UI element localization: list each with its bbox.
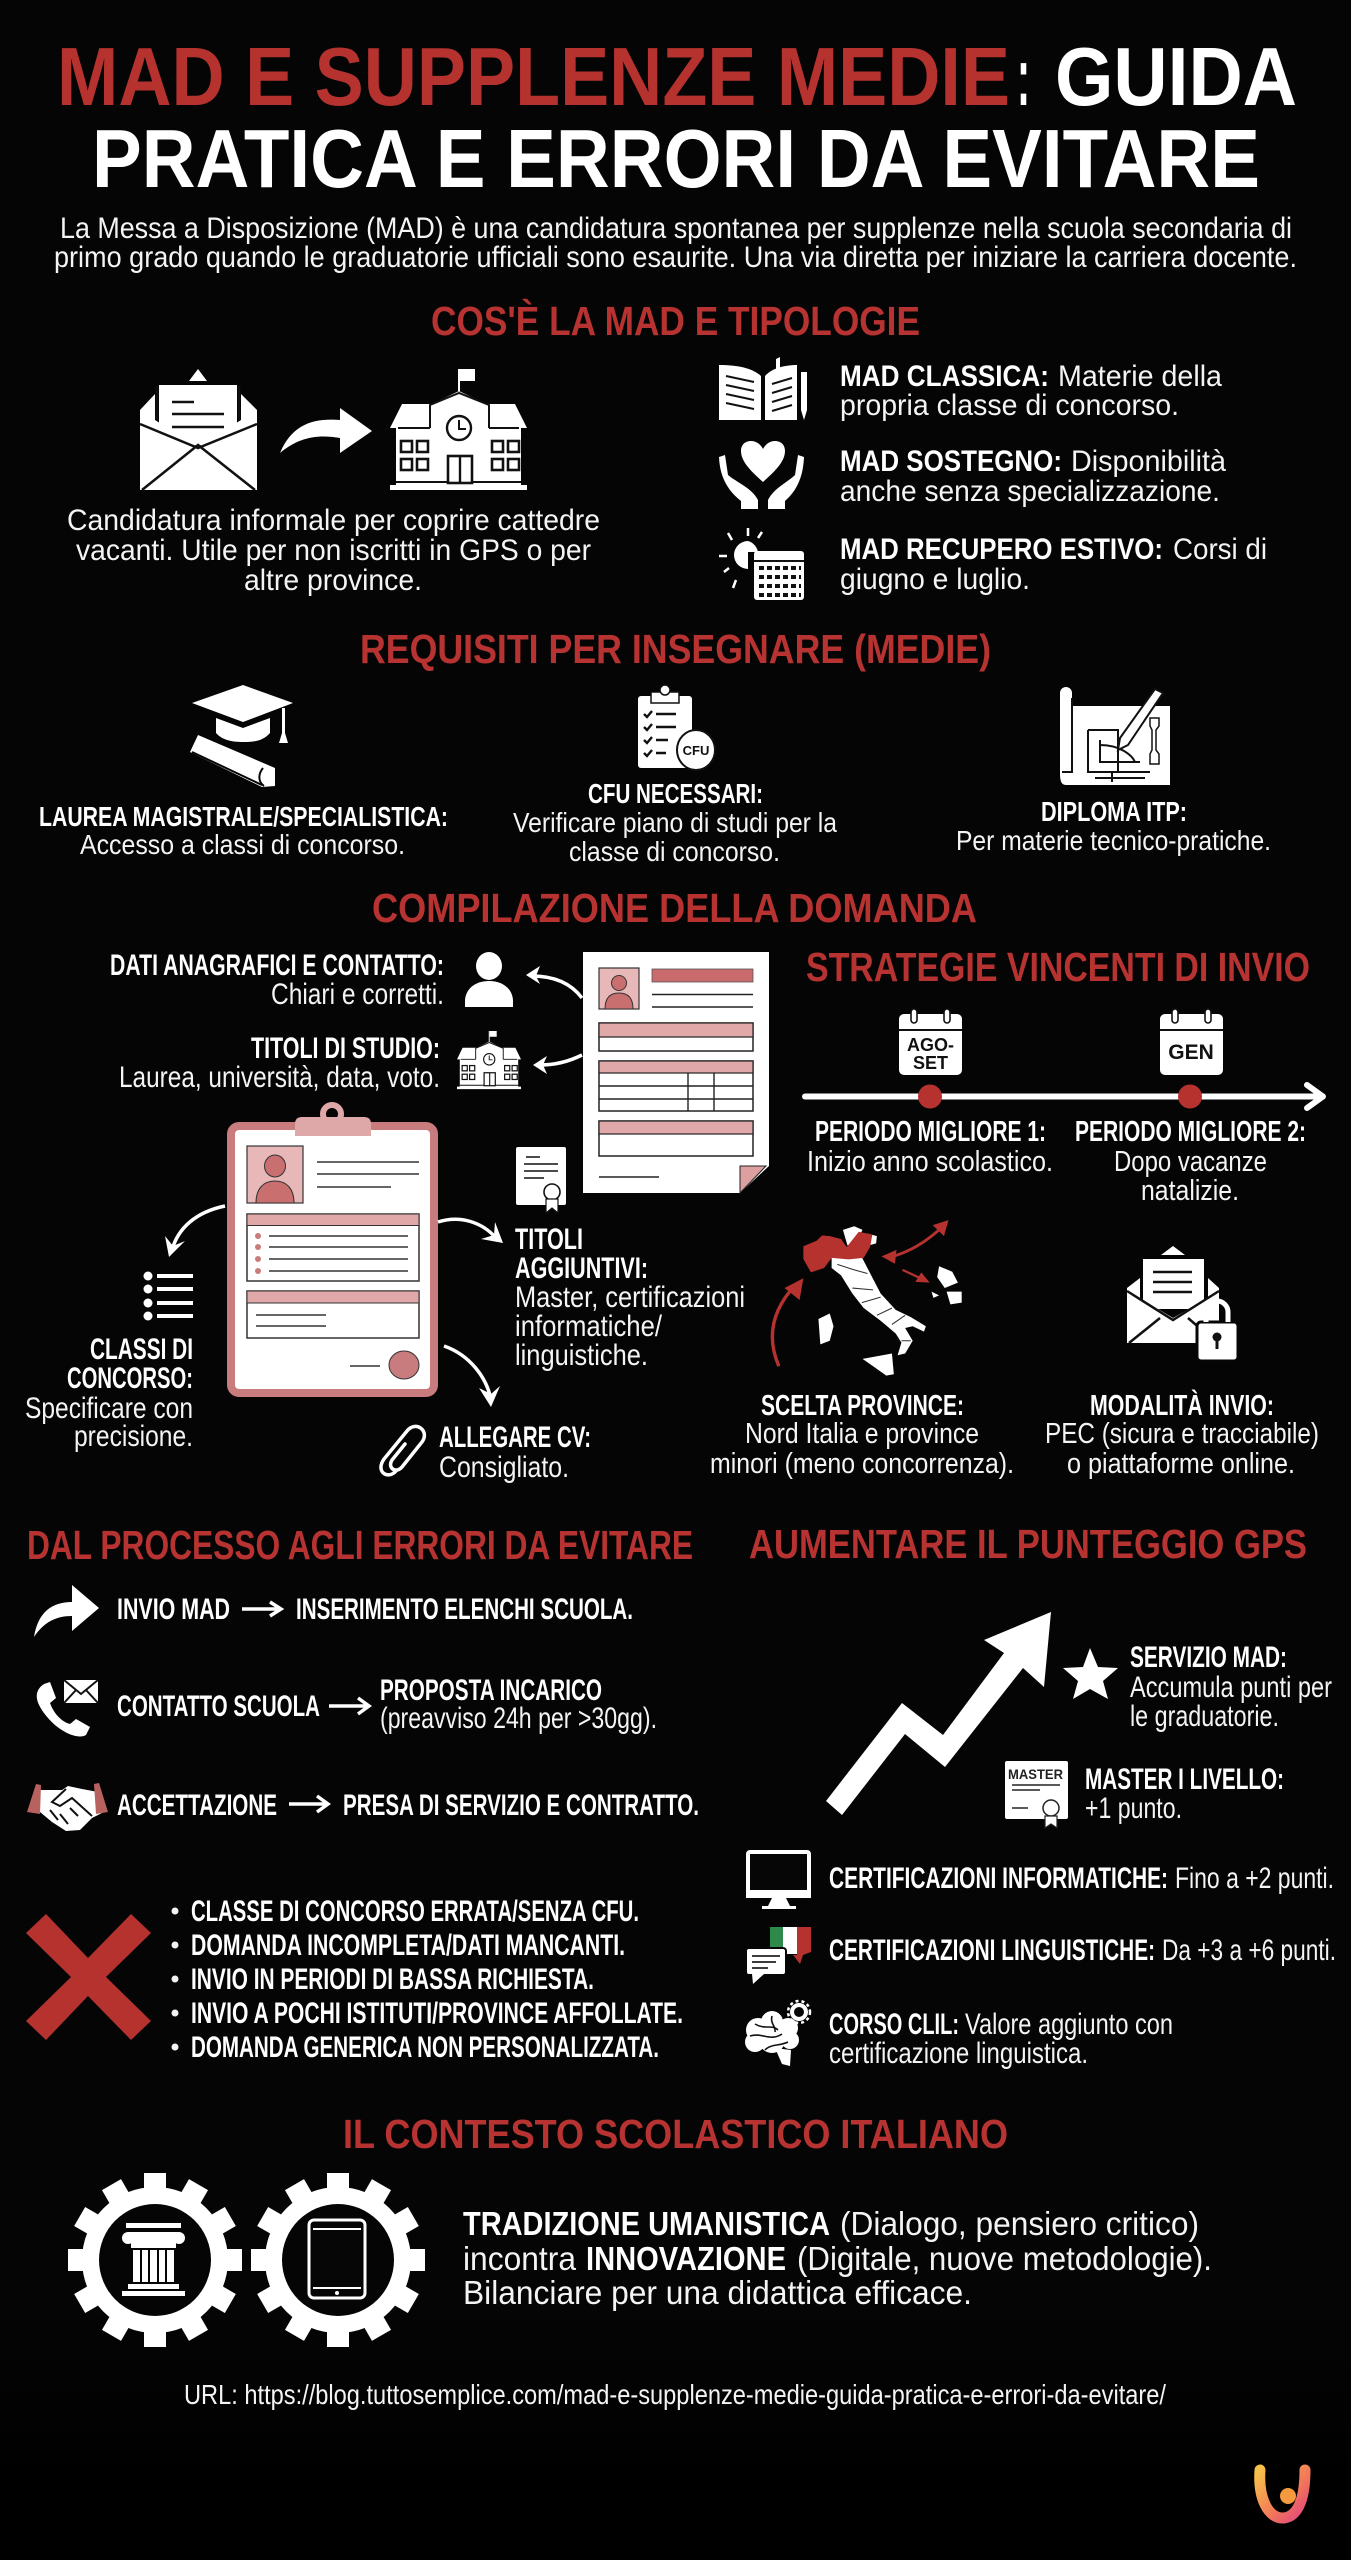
icon: handshake (27, 1783, 108, 1831)
text: context (463, 2205, 1212, 2311)
panel: application form (25, 949, 769, 1484)
text: scelta province (710, 1390, 1014, 1480)
text: mad recupero estivo: giugno e luglio. (840, 563, 1030, 596)
text: mad recupero estivo: Corsi di (1173, 533, 1267, 566)
icon: monitor (746, 1852, 811, 1909)
text: servizio mad: SERVIZIO MAD: (1130, 1641, 1287, 1674)
icon: small school (457, 1031, 521, 1089)
title: MAD E SUPPLENZE MEDIE (57, 30, 1010, 123)
heading: compilazione: COMPILAZIONE DELLA DOMANDA (372, 885, 977, 931)
text: periodo 2: natalizie. (1141, 1175, 1239, 1207)
text: cfu: CFU NECESSARI: (588, 778, 763, 809)
icon: calendar gen (1160, 1009, 1223, 1075)
text: mad classica (840, 360, 1222, 422)
icon: clipboard CFU (638, 685, 715, 770)
text: scelta province: minori (meno concorrenza). (710, 1448, 1014, 1480)
panel: sending strategies (710, 1009, 1323, 1480)
text: cfu (513, 778, 837, 867)
heading: contesto: IL CONTESTO SCOLASTICO ITALIANO (343, 2111, 1008, 2157)
intro text (54, 212, 1297, 274)
text: context: INNOVAZIONE (586, 2240, 786, 2277)
text: mad sostegno: MAD SOSTEGNO: (840, 445, 1062, 478)
text: modalità invio: MODALITÀ INVIO: (1090, 1388, 1274, 1422)
title (57, 30, 1297, 205)
step: accettazione: ACCETTAZIONE (117, 1789, 277, 1822)
text: mad sostegno: Disponibilità (1071, 445, 1226, 478)
text: corso clil: certificazione linguistica. (829, 2037, 1088, 2070)
icon: speech bubbles (746, 1927, 811, 1984)
icon: envelope with lock (1127, 1246, 1238, 1361)
text: allegare cv: Consigliato. (439, 1451, 569, 1484)
icon: italy map (772, 1220, 962, 1376)
icon: brain and gear (745, 2001, 810, 2066)
text: periodo 2 (1075, 1116, 1306, 1207)
text: classi di concorso: CONCORSO: (67, 1362, 193, 1395)
text: mad classica: Materie della (1058, 360, 1222, 393)
timeline (805, 1084, 1323, 1108)
step: contatto: PROPOSTA INCARICO (380, 1674, 602, 1707)
text: diploma: DIPLOMA ITP: (1041, 796, 1187, 827)
icon: school (390, 369, 527, 490)
text: classi di concorso (25, 1333, 193, 1453)
step: contatto: CONTATTO SCUOLA (117, 1690, 320, 1723)
text: periodo 2: Dopo vacanze (1114, 1146, 1267, 1178)
text: titoli aggiuntivi (515, 1223, 745, 1372)
document form (583, 952, 769, 1193)
icon: red x (26, 1914, 151, 2040)
logo (1260, 2470, 1305, 2518)
text: classi di concorso: CLASSI DI (90, 1333, 193, 1366)
icon: list (144, 1272, 193, 1320)
text: context: (Dialogo, pensiero critico) (840, 2205, 1199, 2242)
step: invio: INSERIMENTO ELENCHI SCUOLA. (296, 1593, 633, 1626)
text: definition (67, 504, 600, 597)
panel: definition (67, 369, 600, 597)
list of errors: DOMANDA GENERICA NON PERSONALIZZATA. (191, 2031, 659, 2064)
text: scelta province: Nord Italia e province (745, 1418, 979, 1450)
text: titoli aggiuntivi: AGGIUNTIVI: (515, 1252, 648, 1285)
panel: process (27, 1585, 699, 1831)
source url: URL: https://blog.tuttosemplice.com/mad-e-supplenze-medie-guida-pratica-e-errori-da-evitare/ (184, 2379, 1166, 2410)
step: contatto: (preavviso 24h per >30gg). (380, 1702, 657, 1735)
text: master (1085, 1763, 1284, 1825)
arrow: to allegare cv (444, 1346, 500, 1407)
text: mad sostegno (840, 445, 1226, 508)
panel: GPS score (745, 1612, 1336, 2070)
text: diploma: Per materie tecnico-pratiche. (956, 825, 1271, 856)
title: GUIDA (1055, 30, 1297, 123)
text: mad sostegno: anche senza specializzazione. (840, 475, 1220, 508)
icon: calendar gen: GEN (1168, 1041, 1214, 1064)
icon: phone and mail (37, 1680, 98, 1736)
text: mad classica: MAD CLASSICA: (840, 360, 1049, 393)
text: definition: altre province. (244, 564, 422, 597)
text: definition: Candidatura informale per coprire cattedre (67, 504, 600, 537)
text: certificazioni informatiche: CERTIFICAZIONI INFORMATICHE: (829, 1862, 1168, 1895)
arrow: to person (526, 966, 582, 998)
step: accettazione (117, 1789, 699, 1822)
text: titoli aggiuntivi: Master, certificazioni (515, 1281, 745, 1314)
arrow: to school (533, 1055, 582, 1074)
text: titoli aggiuntivi: TITOLI (515, 1223, 583, 1256)
clipboard form (231, 1105, 434, 1393)
text: classi di concorso: Specificare con (25, 1392, 193, 1425)
text: context: (Digitale, nuove metodologie). (797, 2240, 1212, 2277)
panel: errors (26, 1895, 683, 2064)
icon: gear with column (68, 2173, 242, 2347)
icon: certificate (516, 1147, 566, 1213)
icon: hands and heart (719, 441, 804, 509)
icon: master certificate (1005, 1761, 1068, 1828)
arrow: to titoli aggiuntivi (438, 1219, 503, 1243)
heading: dal processo: DAL PROCESSO AGLI ERRORI DA EVITARE (27, 1522, 693, 1568)
text: cfu: Verificare piano di studi per la (513, 807, 837, 838)
text: titoli di studio: TITOLI DI STUDIO: (251, 1032, 440, 1065)
icon: sun and calendar (719, 528, 804, 600)
list of errors: CLASSE DI CONCORSO ERRATA/SENZA CFU. (191, 1895, 639, 1928)
icon: paperclip (381, 1426, 424, 1475)
panel: types of MAD (719, 357, 1267, 600)
list of errors: DOMANDA INCOMPLETA/DATI MANCANTI. (191, 1929, 625, 1962)
text: periodo 1 (807, 1116, 1053, 1178)
text: corso clil (829, 2008, 1173, 2070)
icon: gear with tablet (251, 2173, 425, 2347)
panel: requirements (39, 685, 1271, 867)
text: titoli di studio: Laurea, università, data, voto. (119, 1061, 440, 1094)
text: modalità invio: o piattaforme online. (1067, 1448, 1295, 1480)
text: master: +1 punto. (1085, 1792, 1182, 1825)
icon: blueprint (1060, 687, 1170, 785)
text: scelta province: SCELTA PROVINCE: (761, 1390, 964, 1422)
arrow: envelope to school (280, 408, 372, 453)
icon: clipboard CFU: CFU (683, 743, 709, 758)
text: certificazioni linguistiche: CERTIFICAZIONI LINGUISTICHE: (829, 1934, 1155, 1967)
icon: calendar ago-set: SET (913, 1053, 948, 1073)
text: laurea (39, 801, 448, 860)
step: contatto (117, 1674, 657, 1735)
icon: calendar ago-set (899, 1009, 962, 1075)
text: definition: vacanti. Utile per non iscritti in GPS o per (76, 534, 591, 567)
text: cfu: classe di concorso. (569, 836, 780, 867)
text: laurea: LAUREA MAGISTRALE/SPECIALISTICA: (39, 801, 448, 832)
text: diploma (956, 796, 1271, 856)
text: corso clil: CORSO CLIL: (829, 2008, 959, 2041)
text: context: Bilanciare per una didattica efficace. (463, 2274, 972, 2311)
text: context: TRADIZIONE UMANISTICA (463, 2205, 830, 2242)
list of errors: INVIO A POCHI ISTITUTI/PROVINCE AFFOLLATE. (191, 1997, 683, 2030)
text: allegare cv: ALLEGARE CV: (439, 1421, 591, 1454)
text: periodo 1: PERIODO MIGLIORE 1: (815, 1116, 1046, 1148)
list of errors (172, 1895, 683, 2064)
text: dati anagrafici (110, 949, 444, 1011)
text: titoli aggiuntivi: linguistiche. (515, 1339, 648, 1372)
text: mad classica: propria classe di concorso. (840, 389, 1179, 422)
icon: envelope (140, 369, 257, 490)
text: allegare cv (439, 1421, 591, 1484)
icon: master certificate: MASTER (1008, 1766, 1063, 1782)
text: corso clil: Valore aggiunto con (965, 2008, 1173, 2041)
icon: rising arrow (826, 1612, 1051, 1815)
step: accettazione: PRESA DI SERVIZIO E CONTRATTO. (343, 1789, 699, 1822)
text: classi di concorso: precisione. (74, 1420, 193, 1453)
icon: send arrow (34, 1585, 99, 1637)
panel: context (68, 2173, 1212, 2347)
icon: book (719, 357, 807, 420)
text: servizio mad (1130, 1641, 1332, 1733)
icon: person (465, 952, 513, 1007)
text: context: incontra (463, 2240, 577, 2277)
step: invio (117, 1593, 633, 1626)
text: titoli aggiuntivi: informatiche/ (515, 1310, 663, 1343)
heading: requisiti: REQUISITI PER INSEGNARE (MEDIE) (360, 626, 991, 672)
text: mad recupero estivo (840, 533, 1267, 596)
heading: cos'è la mad: COS'È LA MAD E TIPOLOGIE (431, 298, 920, 344)
title: : (1017, 30, 1030, 123)
arrow: to classi di concorso (165, 1206, 225, 1257)
text: mad recupero estivo: MAD RECUPERO ESTIVO: (840, 533, 1163, 566)
text: laurea: Accesso a classi di concorso. (80, 829, 405, 860)
text: servizio mad: le graduatorie. (1130, 1700, 1279, 1733)
list of errors: INVIO IN PERIODI DI BASSA RICHIESTA. (191, 1963, 594, 1996)
text: periodo 1: Inizio anno scolastico. (807, 1146, 1053, 1178)
text: modalità invio (1045, 1388, 1319, 1480)
text: dati anagrafici: DATI ANAGRAFICI E CONTATTO: (110, 949, 444, 982)
icon: graduation cap and diploma (190, 685, 293, 787)
text: dati anagrafici: Chiari e corretti. (271, 978, 444, 1011)
text: titoli di studio (119, 1032, 440, 1094)
step: invio: INVIO MAD (117, 1593, 230, 1626)
icon: calendar ago-set: AGO- (907, 1035, 954, 1055)
icon: star (1063, 1648, 1118, 1699)
